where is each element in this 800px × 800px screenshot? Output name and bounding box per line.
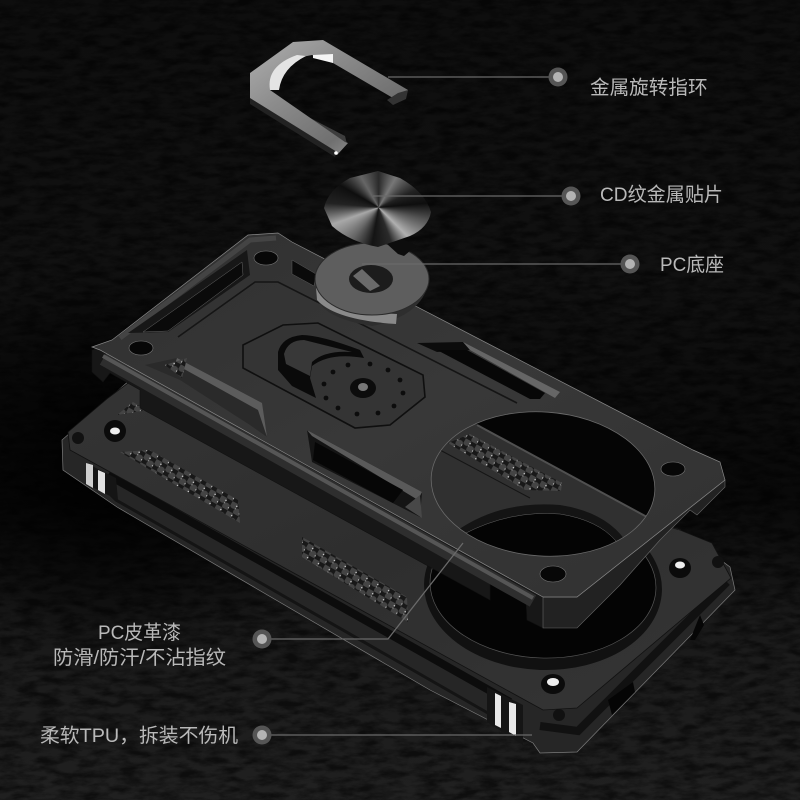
callout: metal ring: 金属旋转指环 <box>590 77 708 99</box>
grip small <box>117 402 147 415</box>
grip strip 1 <box>120 450 240 523</box>
callout: soft TPU <box>40 725 532 747</box>
dark arch <box>278 335 364 398</box>
opening dark upper area <box>476 412 654 516</box>
metal rotating ring <box>250 40 408 157</box>
callout: PC leather coat: 防滑/防汗/不沾指纹 <box>53 647 226 669</box>
screw holes <box>129 251 685 582</box>
ring top face <box>250 40 408 155</box>
callout: PC base <box>362 254 724 276</box>
lower TPU case <box>62 378 735 753</box>
lower case side band <box>62 380 735 753</box>
ring under band <box>250 91 347 155</box>
panel lines <box>178 282 517 403</box>
upper camera opening <box>441 412 654 556</box>
opening grip strip <box>448 434 562 491</box>
side port <box>608 682 635 715</box>
lower camera hole <box>421 500 665 674</box>
callout: PC leather coat <box>53 543 463 669</box>
upper case front rail <box>92 348 543 628</box>
callout: CD metal sticker: CD纹金属贴片 <box>600 184 723 206</box>
window lower notch <box>405 495 422 518</box>
PC base disc <box>315 238 429 326</box>
lower case top face <box>68 378 731 710</box>
upper case top face <box>92 233 725 597</box>
screw posts <box>72 420 724 721</box>
CD metal disc <box>324 171 431 247</box>
callout: PC base: PC底座 <box>660 254 724 276</box>
upper hard case <box>92 233 725 628</box>
opening outline <box>426 404 660 564</box>
notch <box>387 238 418 256</box>
opening strip edge <box>477 425 647 517</box>
lower hole seen through opening <box>460 504 623 541</box>
window small top <box>292 260 316 286</box>
ring highlights <box>313 54 333 63</box>
side buttons right <box>487 687 523 745</box>
callout: metal ring <box>388 68 708 99</box>
stud ring <box>322 362 405 416</box>
center stud <box>350 378 376 398</box>
upper case right rail <box>543 480 725 628</box>
callout: CD metal sticker <box>373 184 723 206</box>
octagon recess <box>243 323 425 428</box>
window long left <box>128 250 250 333</box>
callout: soft TPU: 柔软TPU，拆装不伤机 <box>40 725 238 747</box>
base center hole <box>349 265 393 293</box>
callout: PC leather coat: PC皮革漆 <box>98 622 181 644</box>
window bottom <box>307 430 422 517</box>
side buttons left <box>86 463 118 500</box>
window right top <box>417 342 560 399</box>
grip strip 2 <box>302 537 408 622</box>
window left lower <box>145 358 267 437</box>
